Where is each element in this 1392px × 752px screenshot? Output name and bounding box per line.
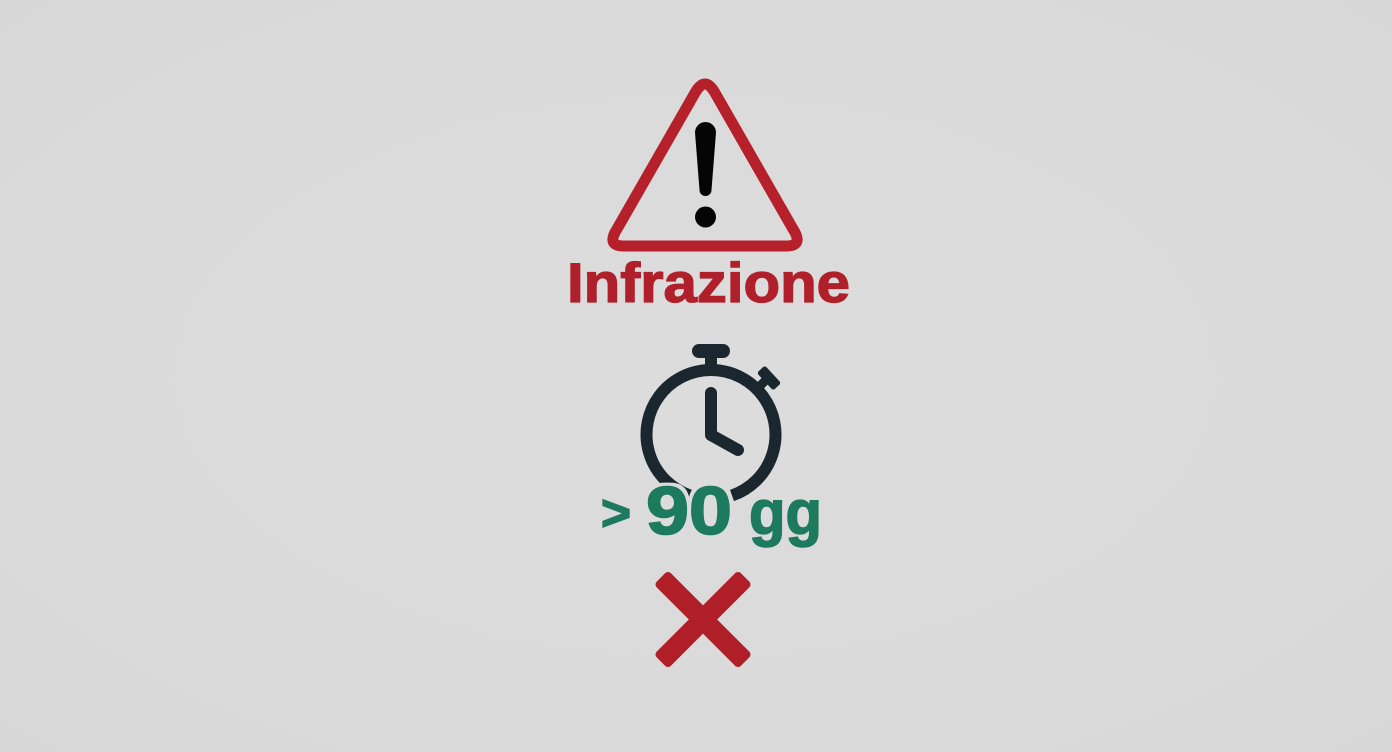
heading: Infrazione: Infrazione <box>567 251 850 314</box>
label: more than 90 days <box>601 473 822 549</box>
label: more than 90 days: gg <box>749 479 822 548</box>
icon: warning triangle <box>613 84 797 246</box>
label: more than 90 days: > <box>601 485 631 541</box>
label: more than 90 days: 90 <box>646 473 732 549</box>
icon: red cross <box>654 570 752 669</box>
icon: stopwatch <box>647 344 781 496</box>
